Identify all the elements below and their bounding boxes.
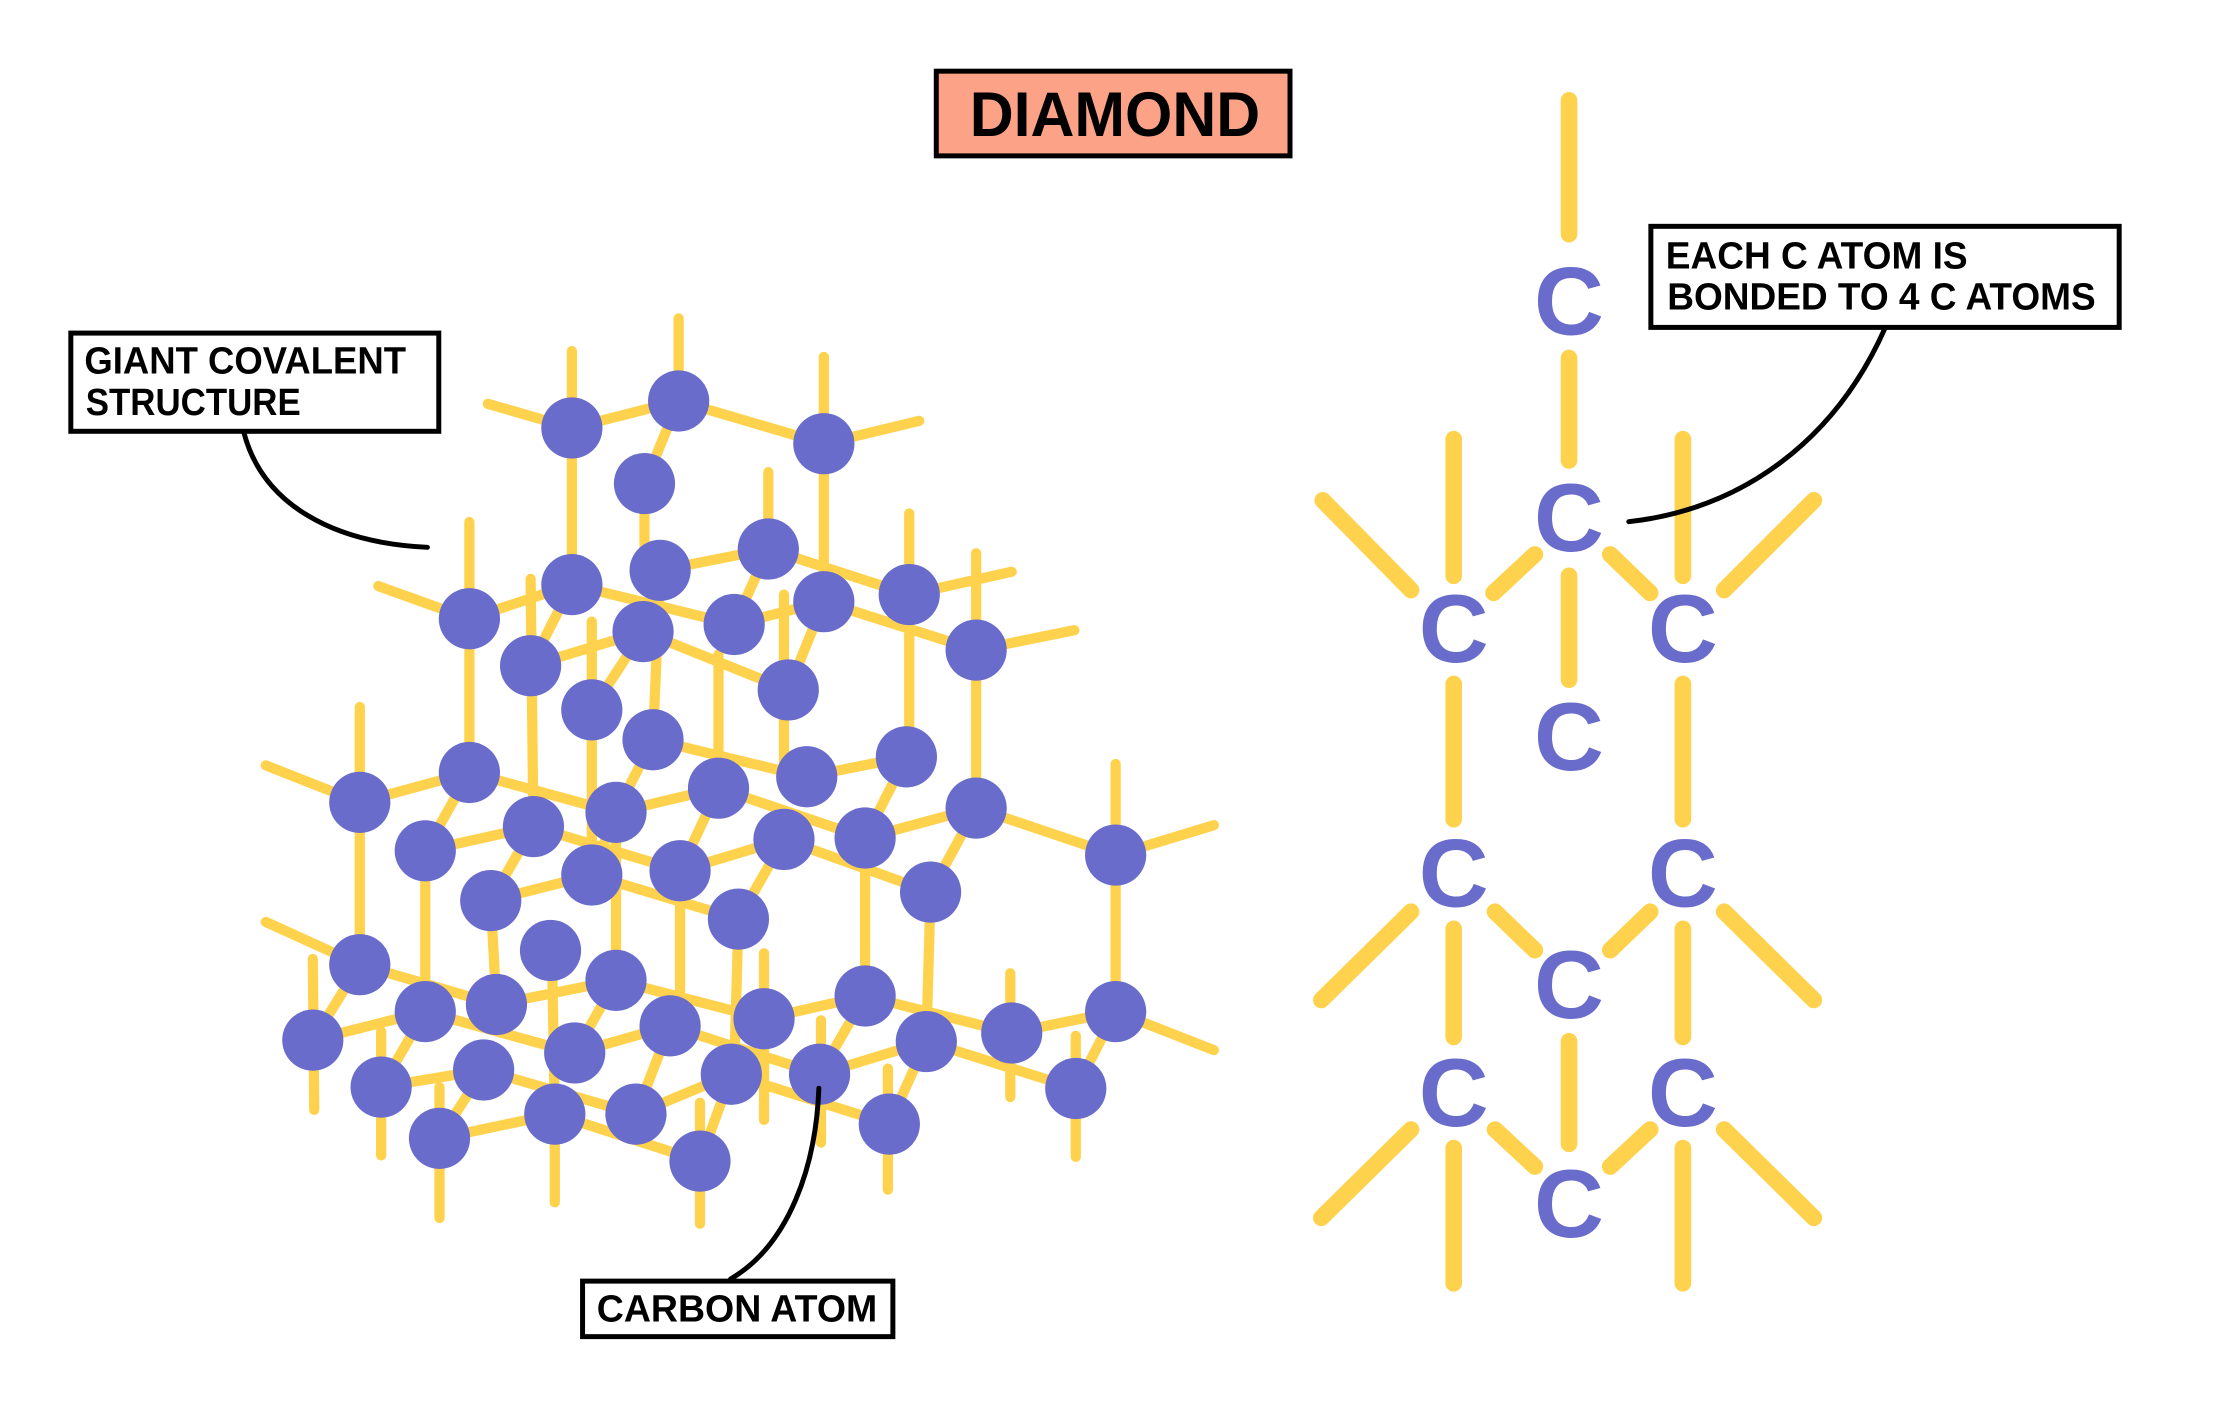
- leader line: [731, 1088, 819, 1279]
- C atom symbols: C: [1419, 819, 1489, 928]
- title: DIAMOND: [936, 71, 1290, 156]
- callout: each C atom bonded to 4 C atoms: [1629, 226, 2119, 522]
- leader line: [1629, 328, 1885, 522]
- C atom symbols: C: [1534, 1149, 1604, 1258]
- C atom symbols: C: [1648, 574, 1718, 683]
- label box: [583, 1281, 893, 1337]
- label text: [1666, 234, 2096, 319]
- label text: [84, 340, 407, 424]
- callout: giant covalent structure: [71, 333, 439, 547]
- label text: BONDED TO 4 C ATOMS: [1667, 276, 2096, 319]
- C atom symbols: C: [1534, 930, 1604, 1039]
- label text: GIANT COVALENT: [84, 340, 407, 383]
- C atom symbols: C: [1648, 1038, 1718, 1147]
- label box: [1651, 226, 2119, 327]
- C atom symbols: C: [1534, 463, 1604, 572]
- C atom symbols: C: [1419, 574, 1489, 683]
- label text: CARBON ATOM: [597, 1288, 877, 1331]
- C atom symbols: C: [1419, 1038, 1489, 1147]
- C atom symbols: C: [1648, 819, 1718, 928]
- title: DIAMOND: DIAMOND: [970, 80, 1260, 150]
- carbon atoms: [282, 370, 1146, 1192]
- label text: EACH C ATOM IS: [1666, 234, 1968, 277]
- label box: [71, 333, 439, 431]
- C atom symbols: C: [1534, 247, 1604, 356]
- structural formula: bonded C atoms: [1321, 100, 1814, 1283]
- label text: STRUCTURE: [86, 381, 301, 424]
- C atom symbols: C: [1534, 682, 1604, 791]
- callout: carbon atom: [583, 1088, 893, 1337]
- leader line: [244, 432, 427, 547]
- C atom symbols: [1419, 247, 1718, 1258]
- giant covalent lattice structure: [266, 318, 1214, 1224]
- lattice bonds: [266, 318, 1214, 1224]
- formula bonds: [1321, 100, 1814, 1283]
